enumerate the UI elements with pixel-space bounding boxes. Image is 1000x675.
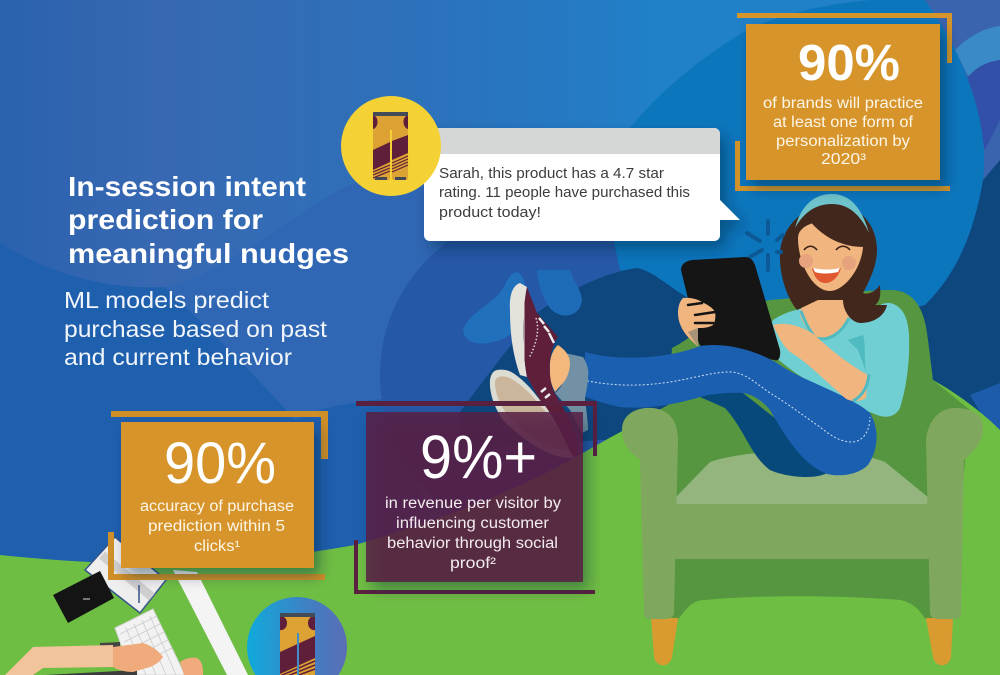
- bubble text: Sarah, this product has a 4.7 star: [439, 166, 664, 182]
- face: [798, 221, 863, 291]
- typing arms: [5, 642, 203, 675]
- card: [121, 422, 314, 568]
- shoes: [490, 283, 578, 458]
- stat description: influencing customer: [396, 515, 549, 532]
- stat description: 2020³: [821, 151, 866, 168]
- woman: [490, 194, 909, 477]
- icon: pants: [280, 613, 315, 675]
- mouth: [812, 268, 841, 283]
- tablet: [681, 257, 780, 361]
- white desk strip: [173, 570, 248, 675]
- bracket and card: center stat: [354, 401, 597, 594]
- hair back: [780, 203, 887, 323]
- signal lines: [747, 221, 783, 270]
- bubble text: product today!: [439, 205, 541, 221]
- laces: [539, 318, 554, 398]
- ground under chair: [678, 596, 926, 620]
- bubble header: [424, 128, 720, 154]
- neck and chest: [800, 280, 850, 339]
- product circle: yellow: [341, 96, 441, 196]
- chair legs: [651, 618, 953, 665]
- stat description: at least one form of: [773, 114, 914, 131]
- seat front: [670, 504, 934, 559]
- stat description: [763, 95, 923, 168]
- eyes: [804, 246, 850, 250]
- black tablet on desk: [53, 571, 114, 623]
- stat number: 90%: [164, 431, 276, 496]
- upper shoe sole: [510, 283, 527, 377]
- subtitle: [64, 287, 327, 370]
- stat description: proof²: [450, 555, 496, 572]
- stat description: [385, 495, 561, 572]
- stat description: in revenue per visitor by: [385, 495, 561, 512]
- icon: pants: [373, 112, 408, 180]
- bubble text: [439, 166, 690, 221]
- left arm: [622, 408, 678, 619]
- speech bubble: [424, 128, 740, 241]
- title: [68, 171, 349, 269]
- cheeks: [799, 254, 856, 270]
- stat description: [140, 498, 294, 555]
- stat description: of brands will practice: [763, 95, 923, 112]
- bracket and card: left stat: [108, 411, 328, 580]
- chair back: [640, 290, 970, 619]
- green hill: [0, 380, 1000, 675]
- pointing arm: [773, 324, 868, 401]
- card: [746, 24, 940, 180]
- title: In-session intent: [68, 171, 306, 202]
- bracket: [108, 411, 328, 580]
- headband: [795, 194, 869, 233]
- open notebook: [85, 537, 166, 613]
- product circle: bottom: [247, 597, 347, 675]
- bracket: [354, 401, 597, 594]
- shirt: [760, 303, 909, 417]
- bracket and card: top right stat: [735, 13, 952, 191]
- shoe body: [523, 287, 578, 457]
- stat description: behavior through social: [387, 535, 558, 552]
- keyboard: [115, 609, 185, 675]
- title: prediction for: [68, 204, 263, 235]
- stat number: 9%+: [420, 423, 537, 491]
- bangs: [796, 208, 872, 247]
- stat description: personalization by: [776, 133, 910, 150]
- bubble shape: [424, 128, 740, 241]
- lower shoe sole: [490, 370, 577, 458]
- armchair: [622, 290, 983, 665]
- jeans: [583, 345, 877, 477]
- card: [366, 412, 583, 582]
- subtitle: purchase based on past: [64, 316, 327, 342]
- seat cushion: [675, 452, 929, 505]
- holding hand: [678, 298, 715, 347]
- sock and ankle: [550, 345, 588, 433]
- title: meaningful nudges: [68, 238, 349, 269]
- desk items: [5, 537, 248, 675]
- stat number: 90%: [798, 34, 900, 91]
- stat description: clicks¹: [194, 538, 240, 555]
- stat description: accuracy of purchase: [140, 498, 294, 515]
- right arm: [926, 408, 983, 619]
- subtitle: and current behavior: [64, 344, 292, 370]
- stat description: prediction within 5: [148, 518, 285, 535]
- background: [0, 0, 1000, 449]
- bubble text: rating. 11 people have purchased this: [439, 185, 690, 201]
- bracket: [735, 13, 952, 191]
- subtitle: ML models predict: [64, 287, 270, 313]
